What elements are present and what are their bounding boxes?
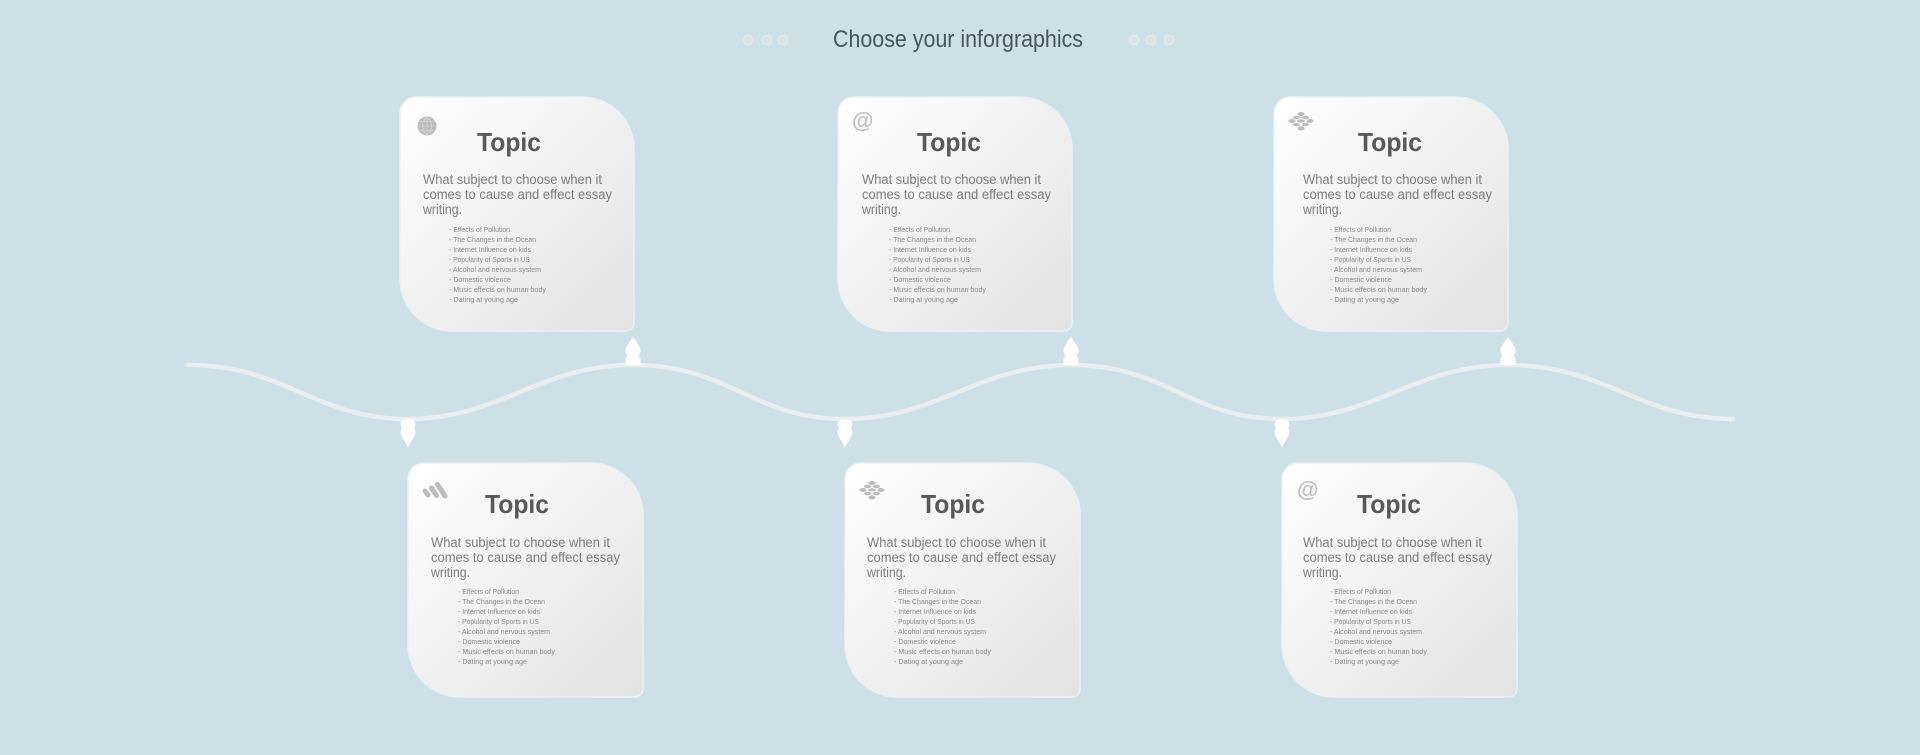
topic list: - The Changes in the Ocean (1330, 235, 1417, 244)
description: comes to cause and effect essay (423, 187, 612, 202)
topic list: - Effects of Pollution (1330, 225, 1391, 234)
topic list: - Music effects on human body (1330, 647, 1427, 656)
heading: Topic (917, 127, 981, 157)
topic list (889, 225, 986, 304)
topic list: - Internet Influence on kids (1330, 607, 1412, 616)
description: comes to cause and effect essay (867, 550, 1056, 565)
topic list: - Alcohol and nervous system (889, 265, 981, 274)
topic list: - Popularity of Sports in US (1330, 617, 1411, 626)
topic list: - Internet Influence on kids (1330, 245, 1412, 254)
icon: stripes (425, 484, 445, 496)
topic list: - Domestic violence (894, 637, 956, 646)
topic list: - The Changes in the Ocean (449, 235, 536, 244)
description: writing. (430, 565, 470, 580)
topic list: - Internet Influence on kids (894, 607, 976, 616)
heading: Topic (921, 489, 985, 519)
topic list (1330, 225, 1427, 304)
panel: top card 2 (838, 97, 1072, 331)
topic list: - Dating at young age (458, 657, 527, 666)
pin: bottom 2 (838, 419, 852, 448)
topic list: - Popularity of Sports in US (894, 617, 975, 626)
description: What subject to choose when it (431, 535, 610, 550)
topic list: - Music effects on human body (449, 285, 546, 294)
topic list: - The Changes in the Ocean (894, 597, 981, 606)
topic list: - Dating at young age (894, 657, 963, 666)
pin: bottom 1 (400, 419, 416, 448)
icon: globe (418, 116, 436, 136)
topic list: - Music effects on human body (894, 647, 991, 656)
topic list: - The Changes in the Ocean (458, 597, 545, 606)
pin: top 2 (1064, 337, 1078, 365)
topic list (1330, 587, 1427, 666)
topic list (894, 587, 991, 666)
description: writing. (861, 202, 901, 217)
description: comes to cause and effect essay (1303, 187, 1492, 202)
icon: at sign: @ (852, 108, 873, 133)
topic list: - Effects of Pollution (449, 225, 510, 234)
topic list: - Internet Influence on kids (458, 607, 540, 616)
icon: diamond weave (860, 481, 884, 500)
topic list: - Music effects on human body (1330, 285, 1427, 294)
icon: at sign: @ (1297, 477, 1318, 502)
description: What subject to choose when it (862, 172, 1041, 187)
topic list: - Internet Influence on kids (449, 245, 531, 254)
topic list: - Music effects on human body (458, 647, 555, 656)
panel: bottom card 2 (845, 463, 1080, 697)
description: comes to cause and effect essay (1303, 550, 1492, 565)
right title dots (1130, 36, 1174, 44)
description: What subject to choose when it (423, 172, 602, 187)
topic list: - Alcohol and nervous system (449, 265, 541, 274)
topic list: - Popularity of Sports in US (889, 255, 970, 264)
topic list: - Dating at young age (449, 295, 518, 304)
heading: Topic (477, 127, 541, 157)
topic list: - The Changes in the Ocean (1330, 597, 1417, 606)
topic list: - Popularity of Sports in US (1330, 255, 1411, 264)
topic list: - Alcohol and nervous system (458, 627, 550, 636)
topic list: - Effects of Pollution (458, 587, 519, 596)
topic list: - Domestic violence (449, 275, 511, 284)
topic list: - The Changes in the Ocean (889, 235, 976, 244)
description (422, 172, 612, 217)
description (430, 535, 620, 580)
topic list: - Effects of Pollution (889, 225, 950, 234)
wave timeline (188, 365, 1733, 419)
description: writing. (422, 202, 462, 217)
panel: bottom card 1 (408, 463, 643, 697)
topic list: - Effects of Pollution (1330, 587, 1391, 596)
description (861, 172, 1051, 217)
title: Choose your inforgraphics (833, 26, 1083, 53)
left title dots (744, 36, 788, 44)
description (1302, 535, 1492, 580)
description: writing. (866, 565, 906, 580)
pin: top 1 (626, 337, 640, 365)
description: writing. (1302, 565, 1342, 580)
description: comes to cause and effect essay (431, 550, 620, 565)
topic list: - Domestic violence (1330, 637, 1392, 646)
icon: diamond weave (1288, 112, 1314, 130)
topic list: - Dating at young age (1330, 295, 1399, 304)
description: What subject to choose when it (1303, 535, 1482, 550)
panel: top card 1 (400, 97, 634, 331)
topic list: - Internet Influence on kids (889, 245, 971, 254)
heading: Topic (1357, 489, 1421, 519)
pin: bottom 3 (1274, 419, 1290, 448)
description (866, 535, 1056, 580)
topic list: - Popularity of Sports in US (458, 617, 539, 626)
topic list: - Popularity of Sports in US (449, 255, 530, 264)
topic list (449, 225, 546, 304)
heading: Topic (485, 489, 549, 519)
heading: Topic (1358, 127, 1422, 157)
description (1302, 172, 1492, 217)
description: comes to cause and effect essay (862, 187, 1051, 202)
topic list: - Domestic violence (1330, 275, 1392, 284)
topic list: - Dating at young age (1330, 657, 1399, 666)
topic list: - Domestic violence (458, 637, 520, 646)
topic list (458, 587, 555, 666)
topic list: - Music effects on human body (889, 285, 986, 294)
topic list: - Domestic violence (889, 275, 951, 284)
description: writing. (1302, 202, 1342, 217)
topic list: - Effects of Pollution (894, 587, 955, 596)
panel: bottom card 3 (1282, 463, 1517, 697)
topic list: - Alcohol and nervous system (894, 627, 986, 636)
panel: top card 3 (1274, 97, 1508, 331)
topic list: - Alcohol and nervous system (1330, 627, 1422, 636)
topic list: - Dating at young age (889, 295, 958, 304)
pin: top 3 (1500, 337, 1516, 365)
description: What subject to choose when it (1303, 172, 1482, 187)
topic list: - Alcohol and nervous system (1330, 265, 1422, 274)
description: What subject to choose when it (867, 535, 1046, 550)
